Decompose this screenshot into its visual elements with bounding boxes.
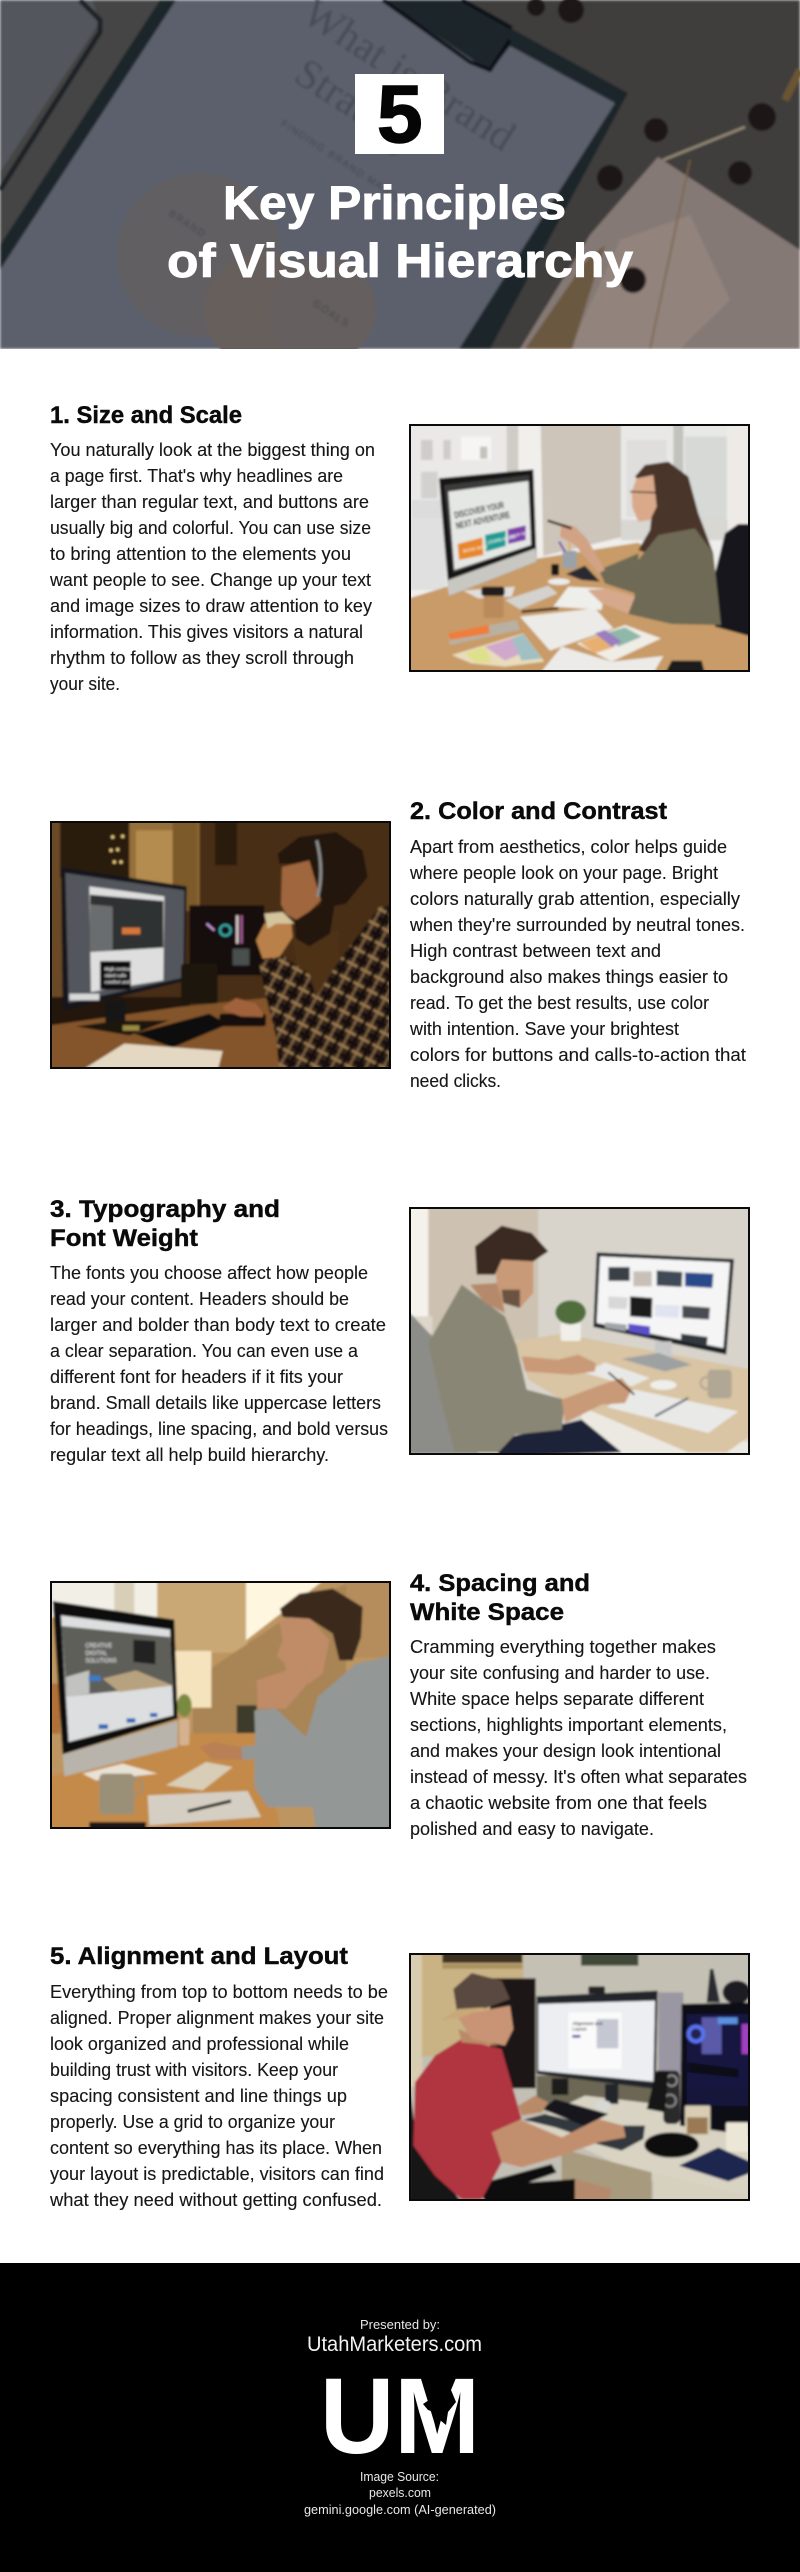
- monitor: sized calls: [105, 973, 127, 978]
- monitor: [61, 867, 187, 1010]
- monitor: LEARN MORE: [487, 534, 516, 545]
- body text 1: You naturally look at the biggest thing on: [50, 440, 375, 460]
- body text 1: want people to see. Change up your text: [49, 570, 371, 590]
- body text 3: larger and bolder than body text to create: [50, 1315, 386, 1335]
- body text 5: content so everything has its place. When: [50, 2138, 382, 2158]
- section 1: size and scale: [49, 402, 755, 694]
- body text 3: read your content. Headers should be: [50, 1289, 349, 1309]
- body text 5: aligned. Proper alignment makes your site: [50, 2008, 384, 2028]
- header photo: clipboard on desk: FINDING BRAND MAGIC: [278, 118, 404, 205]
- photo 5 frame: [410, 1954, 749, 2200]
- body text 1: to bring attention to the elements you: [50, 544, 351, 564]
- title: of Visual Hierarchy: [167, 234, 633, 287]
- monitor: BOOK NOW: [463, 543, 489, 554]
- heading 5: 5. Alignment and Layout: [50, 1943, 348, 1970]
- body text 1: rhythm to follow as they scroll through: [50, 648, 354, 668]
- title: [167, 176, 633, 287]
- body text 2: colors naturally grab attention, especially: [410, 889, 740, 909]
- body text 5: building trust with visitors. Keep your: [50, 2060, 338, 2080]
- body text 5: look organized and professional while: [50, 2034, 349, 2054]
- body text 5: what they need without getting confused.: [49, 2190, 382, 2210]
- body text 4: [410, 1637, 747, 1839]
- monitor: [53, 1601, 178, 1776]
- man: [199, 1589, 393, 1830]
- monitor: SHOP NOW: [509, 529, 532, 539]
- photo 4 frame: [51, 1582, 390, 1828]
- monitor: SOLUTIONS: [85, 1658, 117, 1665]
- header photo: clipboard on desk: BRAND: [166, 208, 208, 241]
- man with headset: [256, 832, 393, 1070]
- body text 1: your site.: [50, 674, 120, 694]
- body text 4: instead of messy. It's often what separates: [410, 1767, 747, 1787]
- body text 5: properly. Use a grid to organize your: [50, 2112, 335, 2132]
- monitor: [439, 469, 537, 596]
- image sources: [304, 2469, 496, 2517]
- heading 4: [410, 1570, 590, 1626]
- body text 3: The fonts you choose affect how people: [50, 1263, 368, 1283]
- monitor: NEXT ADVENTURE: [455, 510, 511, 531]
- body text 2: [409, 837, 746, 1091]
- image sources: Image Source:: [360, 2469, 439, 2484]
- photo 1 frame: [410, 425, 749, 671]
- photo 1: woman pointing at monitor: [405, 420, 755, 676]
- body text 5: your layout is predictable, visitors can find: [50, 2164, 384, 2184]
- section 2: color and contrast: [46, 798, 746, 1091]
- body text 4: your site confusing and harder to use.: [410, 1663, 710, 1683]
- section 3: typography and font weight: [50, 1196, 755, 1465]
- image sources: gemini.google.com (AI-generated): [304, 2502, 496, 2517]
- monitor: CREATIVE: [85, 1643, 112, 1650]
- body text 3: regular text all help build hierarchy.: [50, 1445, 329, 1465]
- body text 3: [50, 1263, 388, 1465]
- section 5: alignment and layout: [49, 1943, 755, 2210]
- man: [409, 1226, 632, 1456]
- heading 4: 4. Spacing and: [410, 1570, 590, 1597]
- man: [409, 1973, 626, 2202]
- monitors: Alignment and: [572, 2021, 603, 2026]
- header banner: [0, 0, 800, 368]
- badge: number 5: [355, 69, 444, 160]
- photo 2 frame: [51, 822, 390, 1068]
- section 4: spacing and white space: [46, 1570, 747, 1839]
- body text 2: background also makes things easier to: [410, 967, 728, 987]
- gaming pc: [680, 2002, 752, 2136]
- photo 4: man in hoodie at monitor: [46, 1577, 396, 1833]
- heading 3: 3. Typography and: [50, 1196, 280, 1223]
- body text 2: when they're surrounded by neutral tones.: [409, 915, 745, 935]
- monitor: DIGITAL: [85, 1650, 108, 1657]
- badge: number 5: 5: [377, 69, 423, 160]
- body text 3: for headings, line spacing, and bold versus: [50, 1419, 388, 1439]
- title: Key Principles: [223, 176, 566, 229]
- body text 2: need clicks.: [410, 1071, 501, 1091]
- monitors: Layout: [572, 2026, 587, 2031]
- body text 2: read. To get the best results, use color: [410, 993, 709, 1013]
- presented by: Presented by:: [360, 2317, 440, 2332]
- image sources: pexels.com: [369, 2485, 431, 2500]
- body text 1: information. This gives visitors a natural: [50, 622, 363, 642]
- body text 2: colors for buttons and calls-to-action that: [410, 1045, 746, 1065]
- photo 2: man at monitor in dark room: [46, 817, 396, 1073]
- woman: [548, 462, 721, 625]
- body text 4: Cramming everything together makes: [410, 1637, 716, 1657]
- photo 3: man writing at bright desk: [405, 1203, 755, 1459]
- heading 3: [50, 1196, 280, 1252]
- heading 4: White Space: [410, 1599, 564, 1626]
- body text 2: where people look on your page. Bright: [409, 863, 718, 883]
- body text 4: and makes your design look intentional: [410, 1741, 721, 1761]
- body text 4: a chaotic website from one that feels: [410, 1793, 707, 1813]
- monitor: DISCOVER YOUR: [453, 500, 505, 520]
- body text 1: larger than regular text, and buttons are: [50, 492, 369, 512]
- body text 1: usually big and colorful. You can use size: [50, 518, 371, 538]
- body text 4: sections, highlights important elements,: [410, 1715, 727, 1735]
- body text 2: Apart from aesthetics, color helps guide: [410, 837, 727, 857]
- heading 2: 2. Color and Contrast: [410, 798, 667, 825]
- heading 1: 1. Size and Scale: [50, 402, 242, 429]
- header photo: clipboard on desk: [0, 0, 800, 368]
- footer: [0, 2263, 800, 2572]
- body text 3: brand. Small details like uppercase letters: [50, 1393, 381, 1413]
- body text 2: High contrast between text and: [410, 941, 661, 961]
- monitors: [537, 1986, 658, 2104]
- body text 5: [49, 1982, 388, 2210]
- body text 1: and image sizes to draw attention to key: [50, 596, 372, 616]
- monitor: comfort and: [105, 980, 130, 985]
- body text 3: different font for headers if it fits your: [50, 1367, 343, 1387]
- photo 3 frame: [410, 1208, 749, 1454]
- site name: UtahMarketers.com: [307, 2333, 482, 2356]
- body text 2: with intention. Save your brightest: [409, 1019, 679, 1039]
- photo 5: man in red shirt at desk: [405, 1949, 755, 2205]
- body text 5: Everything from top to bottom needs to be: [50, 1982, 388, 2002]
- logo: UM with mountain: UM: [320, 2355, 480, 2476]
- monitor: [593, 1252, 734, 1355]
- monitor: High contrast: [105, 966, 133, 971]
- body text 4: White space helps separate different: [410, 1689, 704, 1709]
- body text 3: a clear separation. You can even use a: [50, 1341, 359, 1361]
- heading 3: Font Weight: [50, 1225, 198, 1252]
- body text 5: spacing consistent and line things up: [50, 2086, 347, 2106]
- body text 4: polished and easy to navigate.: [410, 1819, 654, 1839]
- header photo: clipboard on desk: Strategy: [287, 50, 429, 165]
- body text 1: a page first. That's why headlines are: [50, 466, 343, 486]
- header photo: clipboard on desk: GOALS: [310, 298, 352, 330]
- body text 1: [49, 440, 375, 694]
